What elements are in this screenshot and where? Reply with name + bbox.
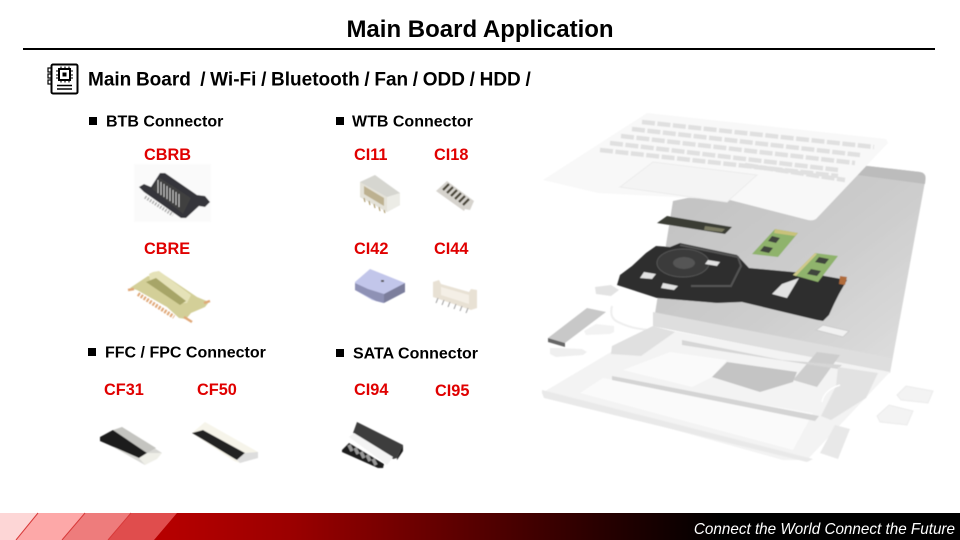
connector image: CBRE xyxy=(128,271,210,322)
label: CBRB: CBRB xyxy=(144,146,191,164)
label: CF50: CF50 xyxy=(197,381,237,399)
label: CF31: CF31 xyxy=(104,381,144,399)
RAM modules xyxy=(752,229,838,282)
panel: FFC / FPC connector xyxy=(88,344,266,465)
heading: BTB connector: BTB Connector xyxy=(106,114,223,130)
panel: SATA connector xyxy=(336,346,478,468)
right speaker parts xyxy=(877,386,933,425)
connector image: CI44 xyxy=(433,280,477,313)
connector image: CI94 xyxy=(342,422,403,468)
label: CI44: CI44 xyxy=(434,240,468,258)
connector image: CBRB xyxy=(134,164,211,222)
panel: WTB connector xyxy=(336,114,477,313)
connector image: CI42 xyxy=(355,269,405,303)
icon: circuit board xyxy=(48,64,78,94)
label: CI18: CI18 xyxy=(434,146,468,164)
wireless card xyxy=(816,325,849,337)
label: CI42: CI42 xyxy=(354,240,388,258)
connector image: CF31 xyxy=(100,427,162,465)
SSD module xyxy=(657,216,732,234)
motherboard xyxy=(617,243,847,321)
small loose parts xyxy=(595,285,619,296)
footer bar xyxy=(0,513,960,540)
left speaker parts xyxy=(548,308,614,357)
panel: BTB connector xyxy=(89,114,223,322)
label: CI11: CI11 xyxy=(354,146,388,164)
heading: SATA connector: SATA Connector xyxy=(353,346,478,362)
title: Main Board Application xyxy=(346,16,614,43)
subheading: interface list: Main Board / Wi-Fi / Bluetooth / Fan / ODD / HDD / xyxy=(88,70,531,90)
laptop base xyxy=(542,326,890,462)
footer tagline: Connect the World Connect the Future xyxy=(694,521,955,538)
keyboard deck xyxy=(543,113,888,220)
label: CBRE: CBRE xyxy=(144,240,190,258)
heading: WTB connector: WTB Connector xyxy=(352,114,473,130)
label: CI94: CI94 xyxy=(354,381,388,399)
illustration: exploded laptop xyxy=(542,113,933,462)
connector image: CI18 xyxy=(436,181,474,211)
connector image: CI11 xyxy=(360,175,400,213)
connector image: CF50 xyxy=(192,422,258,463)
label: CI95: CI95 xyxy=(435,382,469,400)
heading: FFC / FPC connector: FFC / FPC Connector xyxy=(105,344,266,362)
laptop screen xyxy=(653,164,926,373)
